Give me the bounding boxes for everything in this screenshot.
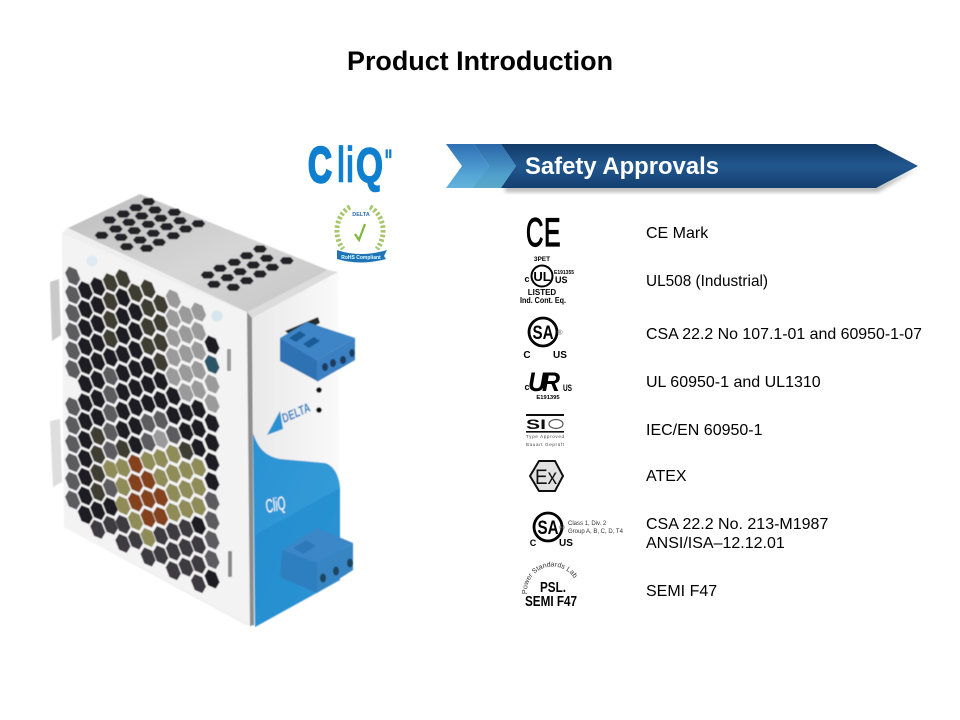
delta triangle logo: [267, 411, 283, 435]
icon: CSA: C: [523, 350, 531, 361]
ribbon: [337, 250, 387, 262]
top vents right: [201, 245, 294, 291]
product photo: power supply: [50, 194, 355, 627]
icon: SIQ type approved: [526, 414, 565, 447]
logo: RoHS compliant wreath: [337, 207, 387, 262]
title: Product Introduction: [347, 46, 613, 76]
logo: CliQ II: i: [346, 137, 354, 193]
label: ATEX: [646, 468, 687, 485]
delta wordmark: DELTA: [279, 400, 313, 426]
icon: UR recognized: [524, 367, 572, 401]
label: UL 60950-1 and UL1310: [646, 374, 821, 391]
upper output connector: [280, 317, 355, 382]
icon: SIQ type approved: Type Approved: [526, 434, 564, 439]
icon: PSL SEMI F47: SEMI F47: [525, 593, 577, 610]
icon: UL listed: LISTED: [528, 288, 556, 297]
label: ANSI/ISA–12.12.01: [646, 535, 785, 552]
icon: PSL SEMI F47: Power Standards Lab: [522, 562, 577, 594]
logo: CliQ II: Q: [356, 140, 383, 193]
din clip upper: [50, 279, 61, 341]
check mark: [355, 224, 365, 240]
din clip lower: [50, 419, 62, 487]
icon: UR recognized: E191395: [536, 395, 560, 401]
icon: CSA: SA: [532, 323, 554, 344]
label: UL508 (Industrial): [646, 273, 768, 290]
icon: UR recognized: U: [528, 367, 547, 397]
blue panel: [253, 433, 340, 627]
icon: Ex hexagon: Ex: [535, 466, 557, 489]
warning sticker upper: [86, 256, 98, 266]
small cliq logo: CliQ: [264, 493, 288, 518]
banner heading: Safety Approvals: [525, 153, 719, 180]
icon: CE mark: E: [544, 211, 561, 256]
approval row: IEC/EN 60950-1: [526, 414, 763, 447]
icon: UR recognized: c: [524, 382, 530, 392]
banner shadow: [505, 168, 918, 192]
delta label: DELTA: [352, 212, 370, 218]
icon: CSA: ®: [557, 329, 563, 337]
front face: [62, 228, 252, 625]
top vents left: [95, 198, 205, 252]
icon: CE mark: C: [526, 210, 543, 254]
icon: SIQ type approved: Bauart Geprüft: [526, 442, 565, 447]
right face: [247, 270, 340, 627]
icon: UR recognized: R: [542, 367, 560, 397]
top face: [68, 194, 328, 314]
approval row: UL508: [520, 256, 768, 305]
icon: Ex hexagon: [530, 461, 563, 491]
side edge: [247, 312, 254, 626]
banner body: [501, 144, 918, 188]
icon: CSA class 1 div 2: Class 1, Div. 2: [568, 521, 607, 527]
icon: PSL SEMI F47: [522, 562, 577, 610]
icon: CSA: US: [553, 350, 567, 361]
icon: CSA class 1 div 2: C: [530, 538, 537, 548]
icon: UL listed: Ind. Cont. Eq.: [520, 296, 566, 305]
icon: CSA class 1 div 2: SA: [538, 518, 559, 539]
wreath leaves: [337, 207, 383, 249]
icon: CE mark: [526, 210, 561, 256]
icon: SIQ type approved: SI: [526, 416, 546, 432]
icon: CSA class 1 div 2: Group A, B, C, D, T4: [568, 529, 624, 535]
label: CE Mark: [646, 225, 709, 242]
label: SEMI F47: [646, 583, 717, 600]
icon: UL listed: 3PET: [534, 256, 550, 263]
icon: PSL SEMI F47: PSL.: [540, 579, 566, 596]
approval row: SEMI F47: [522, 562, 717, 610]
icon: UL listed: c: [524, 274, 530, 284]
approval row: ATEX: [530, 461, 687, 491]
approval row: CE: [526, 210, 709, 256]
label: IEC/EN 60950-1: [646, 422, 763, 439]
banner: Safety Approvals: [446, 144, 918, 192]
logo: CliQ II: II: [385, 147, 392, 161]
slot right: [227, 349, 231, 371]
approval row: CSA 22.2 No 107.1: [523, 318, 922, 361]
perforated grille: [65, 266, 220, 593]
label: CSA 22.2 No 107.1-01 and 60950-1-07: [646, 326, 922, 343]
label: CSA 22.2 No. 213-M1987: [646, 516, 828, 533]
chevron 2: [473, 144, 516, 188]
icon: UL listed: E191355: [554, 270, 574, 276]
ribbon label: RoHS Compliant: [341, 255, 381, 261]
icon: UL listed: UL: [533, 269, 551, 284]
icon: CSA class 1 div 2: US: [559, 538, 573, 549]
approval row: CSA 213 and ANSI/ISA: [530, 513, 828, 552]
logo: CliQ II: C: [308, 137, 332, 193]
icon: UL listed: [520, 256, 574, 305]
lower input connector: [280, 528, 353, 593]
logo: CliQ II: l: [337, 137, 345, 193]
icon: CSA class 1 div 2: [530, 513, 624, 549]
chevron 1: [446, 144, 489, 188]
slot lower right: [228, 551, 232, 577]
icon: CSA class 1 div 2: ®: [559, 524, 565, 532]
icon: UL listed: US: [555, 275, 568, 285]
status leds: [316, 387, 322, 413]
logo: CliQ II: [308, 137, 392, 193]
icon: CSA: [523, 318, 567, 361]
approval row: UL 60950-1: [524, 367, 821, 401]
icon: UR recognized: US: [563, 383, 572, 393]
warning sticker right: [212, 310, 222, 322]
